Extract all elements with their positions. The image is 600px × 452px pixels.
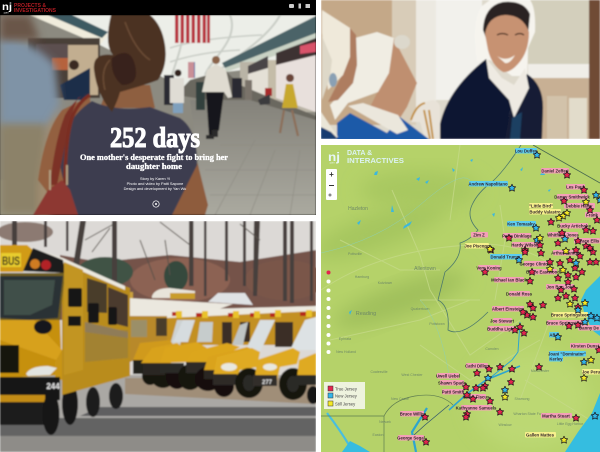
place names bbox=[336, 206, 584, 437]
name labels: George Segal bbox=[397, 436, 425, 440]
name labels: Danny Smithwick bbox=[554, 194, 590, 200]
place names: Kutztown bbox=[378, 281, 392, 285]
name labels: Joe Peru bbox=[582, 370, 600, 374]
name labels: Hardy Wilson bbox=[511, 242, 539, 248]
header logo: INVESTIGATIONS bbox=[14, 8, 57, 14]
place names: Shamong bbox=[515, 397, 530, 401]
name labels: Albert Einstein bbox=[492, 306, 523, 312]
map logo: DATA & bbox=[347, 150, 372, 157]
big foreground bus: 244 bbox=[46, 382, 60, 391]
panel: nuns photo bbox=[321, 0, 600, 140]
delaware bay and ocean bbox=[342, 276, 600, 452]
right nun bbox=[438, 0, 543, 139]
name labels: Joani "Dominator" bbox=[548, 352, 586, 356]
subheading: One mother's desperate fight to bring her bbox=[80, 152, 228, 162]
name labels: Danny De bbox=[579, 326, 600, 330]
place names: Wharton State Forest bbox=[513, 412, 547, 416]
name labels: ABA bbox=[549, 332, 559, 338]
name labels: Bruce Springsteen bbox=[551, 312, 589, 318]
name labels: Bucky Artichoke bbox=[557, 224, 591, 228]
name labels: Buddy Valastro bbox=[529, 210, 561, 214]
name labels bbox=[397, 148, 600, 440]
name labels: Horace Ellis bbox=[575, 238, 600, 244]
place names: Easton bbox=[373, 433, 383, 437]
map logo: .com bbox=[329, 162, 335, 164]
place names: Camden bbox=[485, 347, 499, 351]
header logo: PROJECTS & bbox=[14, 3, 46, 9]
back row buses bbox=[127, 292, 133, 299]
name labels: Uwell Uebel bbox=[436, 374, 460, 378]
name labels: Whitfield Jones bbox=[547, 232, 579, 238]
subheading bbox=[80, 152, 228, 171]
name labels: Arthur Lamber bbox=[551, 250, 581, 256]
headline: 252 days: 252 days bbox=[110, 122, 200, 154]
story navigation dots bbox=[326, 270, 330, 354]
header logo: .com bbox=[3, 12, 8, 14]
name labels: Lou Duffey bbox=[515, 148, 538, 154]
name labels: Andrew Napolitano bbox=[468, 182, 508, 186]
place names: Pottsville bbox=[348, 252, 362, 256]
woman in yellow dress bbox=[280, 74, 298, 136]
name labels: Daniel Zefferi bbox=[541, 168, 569, 174]
legend: New Jersey bbox=[335, 394, 358, 398]
name labels: Kathyanne Samuels bbox=[456, 406, 497, 410]
credits: Design and development by Yan Wu bbox=[124, 186, 186, 191]
chair bbox=[411, 100, 440, 139]
BUS sign: BUS bbox=[2, 254, 20, 268]
place names: West Chester bbox=[401, 373, 423, 377]
name labels: Cathi Dillon bbox=[465, 364, 489, 368]
name labels: Bruce Willis bbox=[400, 412, 425, 416]
name labels: Gallen Mattes bbox=[526, 432, 555, 438]
zoom control bbox=[326, 169, 337, 200]
credits: Story by Karen Yi bbox=[140, 176, 170, 181]
name labels: Les Paul bbox=[566, 184, 584, 190]
place names: Hamburg bbox=[355, 275, 369, 279]
name labels: Michael Ian Black bbox=[491, 278, 528, 282]
place names: Ephrata bbox=[339, 337, 351, 341]
name labels: Peter Dinklage bbox=[502, 234, 533, 238]
name labels: Patti Smith bbox=[442, 390, 465, 394]
header logo bbox=[2, 2, 57, 14]
pink True Jersey stars bbox=[421, 171, 600, 445]
ground bbox=[21, 374, 316, 419]
place names: New Holland bbox=[336, 350, 356, 354]
legend: True Jersey bbox=[335, 386, 358, 392]
place names: Pottstown bbox=[429, 322, 445, 326]
name labels: Kirsten Dunst bbox=[571, 344, 600, 348]
place names: Little Egg Harbor bbox=[557, 422, 584, 426]
name labels: Donald Trump bbox=[491, 254, 520, 260]
map logo bbox=[328, 150, 404, 164]
legend: Still Jersey bbox=[335, 402, 356, 406]
terrain and roads bbox=[308, 145, 590, 450]
place names: New Castle bbox=[391, 397, 409, 401]
place names: Manchester bbox=[531, 369, 550, 373]
yellow Still Jersey stars bbox=[486, 198, 595, 443]
subheading: daughter home bbox=[126, 161, 182, 171]
place names: Winslow bbox=[498, 423, 512, 427]
row of parked buses: 277 bbox=[262, 380, 273, 386]
place names: Reading bbox=[356, 311, 376, 317]
place names: Coatesville bbox=[370, 370, 388, 374]
map logo: nj bbox=[328, 150, 340, 164]
place names: Allentown bbox=[414, 266, 436, 272]
rivers and state border bbox=[321, 145, 600, 452]
photo: train station concourse bbox=[0, 15, 316, 215]
name labels: Debbie Harry bbox=[566, 204, 593, 208]
left nun bbox=[321, 10, 357, 139]
name labels: Jon Bon Jovi bbox=[547, 284, 573, 290]
name labels: Donald Ross bbox=[506, 292, 533, 296]
legend bbox=[324, 382, 365, 409]
icon: scroll down bbox=[153, 201, 159, 207]
header logo: nj bbox=[2, 2, 12, 13]
centre nun bbox=[330, 32, 430, 140]
name labels: Buddha Light bbox=[487, 326, 515, 332]
name labels: Ken Tomasky bbox=[507, 222, 535, 226]
name labels: Kathy Fiscus bbox=[463, 394, 490, 400]
share icons bbox=[289, 4, 310, 8]
BUS sign bbox=[1, 253, 21, 268]
name labels: Shawn Spade bbox=[438, 380, 467, 386]
panel: school buses photo bbox=[0, 221, 325, 452]
name labels: Frank bbox=[586, 212, 598, 218]
big foreground bus bbox=[0, 245, 130, 435]
man in white shirt bbox=[202, 56, 232, 139]
name labels: Zim Z bbox=[473, 232, 485, 238]
credits: Photo and video by Patti Sapone bbox=[127, 181, 183, 186]
name labels: Bruce Springsteen bbox=[546, 320, 584, 326]
blue New Jersey stars bbox=[484, 151, 600, 419]
map markers and labels bbox=[397, 148, 600, 445]
map logo: INTERACTIVES bbox=[347, 158, 404, 165]
woman seen from behind bbox=[33, 15, 208, 215]
name labels: Bruce Eastwood bbox=[526, 270, 560, 274]
panel: 252 days story bbox=[0, 0, 316, 215]
name labels: Joe Stewart bbox=[490, 318, 515, 324]
row of parked buses bbox=[133, 306, 319, 404]
name labels: Kerley bbox=[549, 356, 563, 362]
panel: New Jersey map bbox=[308, 145, 600, 452]
credits bbox=[124, 176, 186, 191]
place names: Quakertown bbox=[411, 307, 429, 311]
place names: Hazleton bbox=[348, 206, 368, 212]
name labels: Joe Piscopo bbox=[464, 244, 490, 248]
name labels: George Clinton bbox=[519, 262, 551, 266]
name labels: "Little Bird" bbox=[529, 204, 553, 208]
name labels: Vern Koning bbox=[476, 266, 502, 270]
zoom control: + bbox=[329, 170, 334, 179]
place names: Newark bbox=[379, 420, 391, 424]
name labels: Martha Stuart bbox=[542, 414, 570, 418]
